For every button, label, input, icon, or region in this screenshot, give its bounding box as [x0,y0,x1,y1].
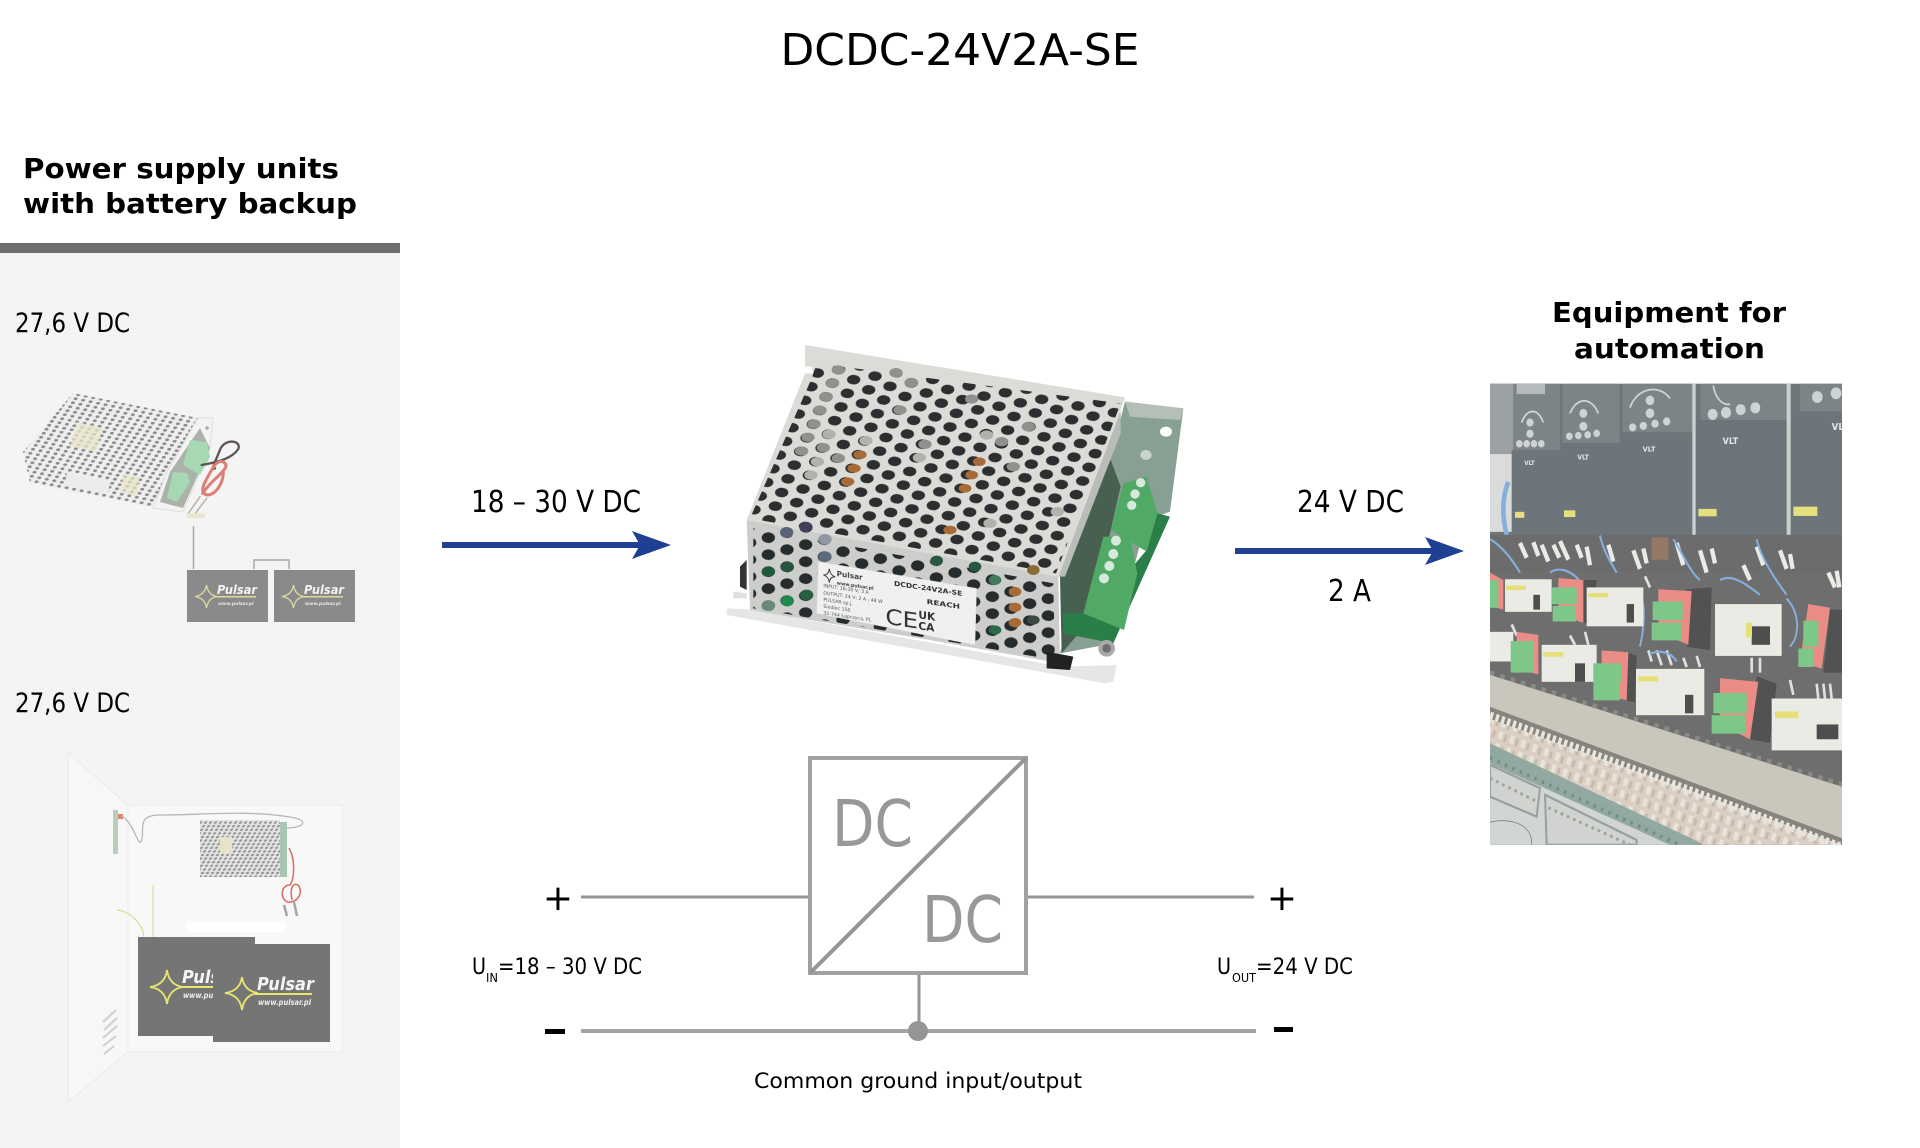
diagram: DC/DC converter schematic [472,758,1353,1093]
heading: equipment for automation: Equipment for [1552,296,1786,329]
input voltage formula: =18 – 30 V DC [498,955,642,980]
contactor blocks [1490,579,1842,750]
floor and lower breakers [1490,763,1670,845]
connector lines [194,526,289,569]
output minus [1274,1027,1293,1032]
base plate [727,608,1117,683]
output voltage formula: =24 V DC [1256,955,1353,980]
icon: battery right: www.pulsar.pl [305,601,341,607]
photo: automation cabinet [1490,384,1844,847]
ground junction dot [908,1021,928,1041]
heading: equipment for automation: automation [1574,332,1765,365]
label: first voltage: 27,6 V DC [15,308,130,339]
teal rail [1490,743,1703,845]
pale wash over photo [1490,384,1842,845]
product label: PULSAR sp.j. [823,597,853,607]
common ground caption: Common ground input/output [754,1069,1082,1093]
interior [1060,453,1121,653]
heading: power supply units: with battery backup [23,187,357,220]
front cover [747,520,1060,663]
product label: INPUT: 18-30 V; 3 A [823,583,869,596]
common ground line [581,1029,1256,1033]
input plus: + [543,878,573,919]
converter box [810,758,1026,973]
product label: www.pulsar.pl [837,580,874,592]
input minus [545,1029,565,1034]
product label [817,562,977,645]
converter box: DC [832,788,913,862]
product label: Siedlec 150 [823,604,851,614]
input voltage label: 18 – 30 V DC [471,485,641,520]
icon: battery left [187,570,268,622]
photo: automation cabinet: VL [1832,422,1844,433]
arrow: output [1235,537,1464,565]
wire band under drives [1490,534,1842,556]
relay modules [1490,573,1830,739]
icon: large battery front: Pulsar [257,974,315,995]
input voltage formula [472,955,642,985]
heading: power supply units [23,152,357,220]
PCB strip [1063,513,1170,643]
icon: battery right [274,570,355,622]
icon: enclosure with power supply and batteries [68,753,342,1102]
top holes with lit interior [795,365,1064,528]
product label: REACH [927,598,960,611]
heading: power supply units: Power supply units [23,152,339,185]
icon: large battery back [138,937,255,1036]
icon: battery left: Pulsar [217,583,258,597]
output voltage label: 24 V DC [1297,485,1404,520]
photo: automation cabinet: VLT [1723,436,1738,446]
product label: UK [918,608,936,624]
product label: CA [918,619,935,635]
product label: CE [885,605,918,634]
photo: automation cabinet: VLT [1524,461,1535,467]
side plate [1060,402,1183,653]
photo: automation cabinet: VLT [1643,444,1656,454]
input voltage formula: U [472,955,486,980]
panel: power supply units [0,243,400,1148]
label: second voltage: 27,6 V DC [15,688,130,719]
terminals below beam [1490,702,1842,845]
title: DCDC-24V2A-SE [780,25,1140,76]
beam [1490,675,1842,838]
icon: battery left: www.pulsar.pl [218,601,254,607]
top cover [747,345,1125,577]
output voltage formula: OUT [1232,971,1257,985]
icon: power supply with wires [23,393,239,518]
photo: automation cabinet: VLT [1577,454,1590,462]
output current label: 2 A [1328,574,1371,609]
icon: battery right: Pulsar [304,583,345,597]
screw and terminal blocks [1160,427,1172,437]
dark shadows behind relays [1583,580,1842,743]
dark wiring row under beam [1490,707,1842,845]
product photo: DCDC-24V2A-SE module [727,345,1183,683]
product label: 32-744 Łapczyca, PL [823,610,872,624]
icon: large battery front [213,944,330,1042]
converter box: DC [922,884,1003,958]
product label: OUTPUT: 24 V; 2 A ; 48 W [823,590,883,605]
product label: DCDC-24V2A-SE [894,580,963,598]
heading: equipment for automation [1552,296,1786,365]
input voltage formula: IN [486,971,498,985]
icon: large battery back: www.pulsar.pl [183,991,236,1000]
product label: Pulsar [837,569,863,582]
output voltage formula [1217,955,1353,985]
output plus: + [1267,878,1297,919]
output voltage formula: U [1217,955,1231,980]
icon: large battery back: Pulsar [182,967,240,988]
arrow: input [442,531,671,559]
wires [581,897,1254,1031]
icon: large battery front: www.pulsar.pl [258,998,311,1007]
